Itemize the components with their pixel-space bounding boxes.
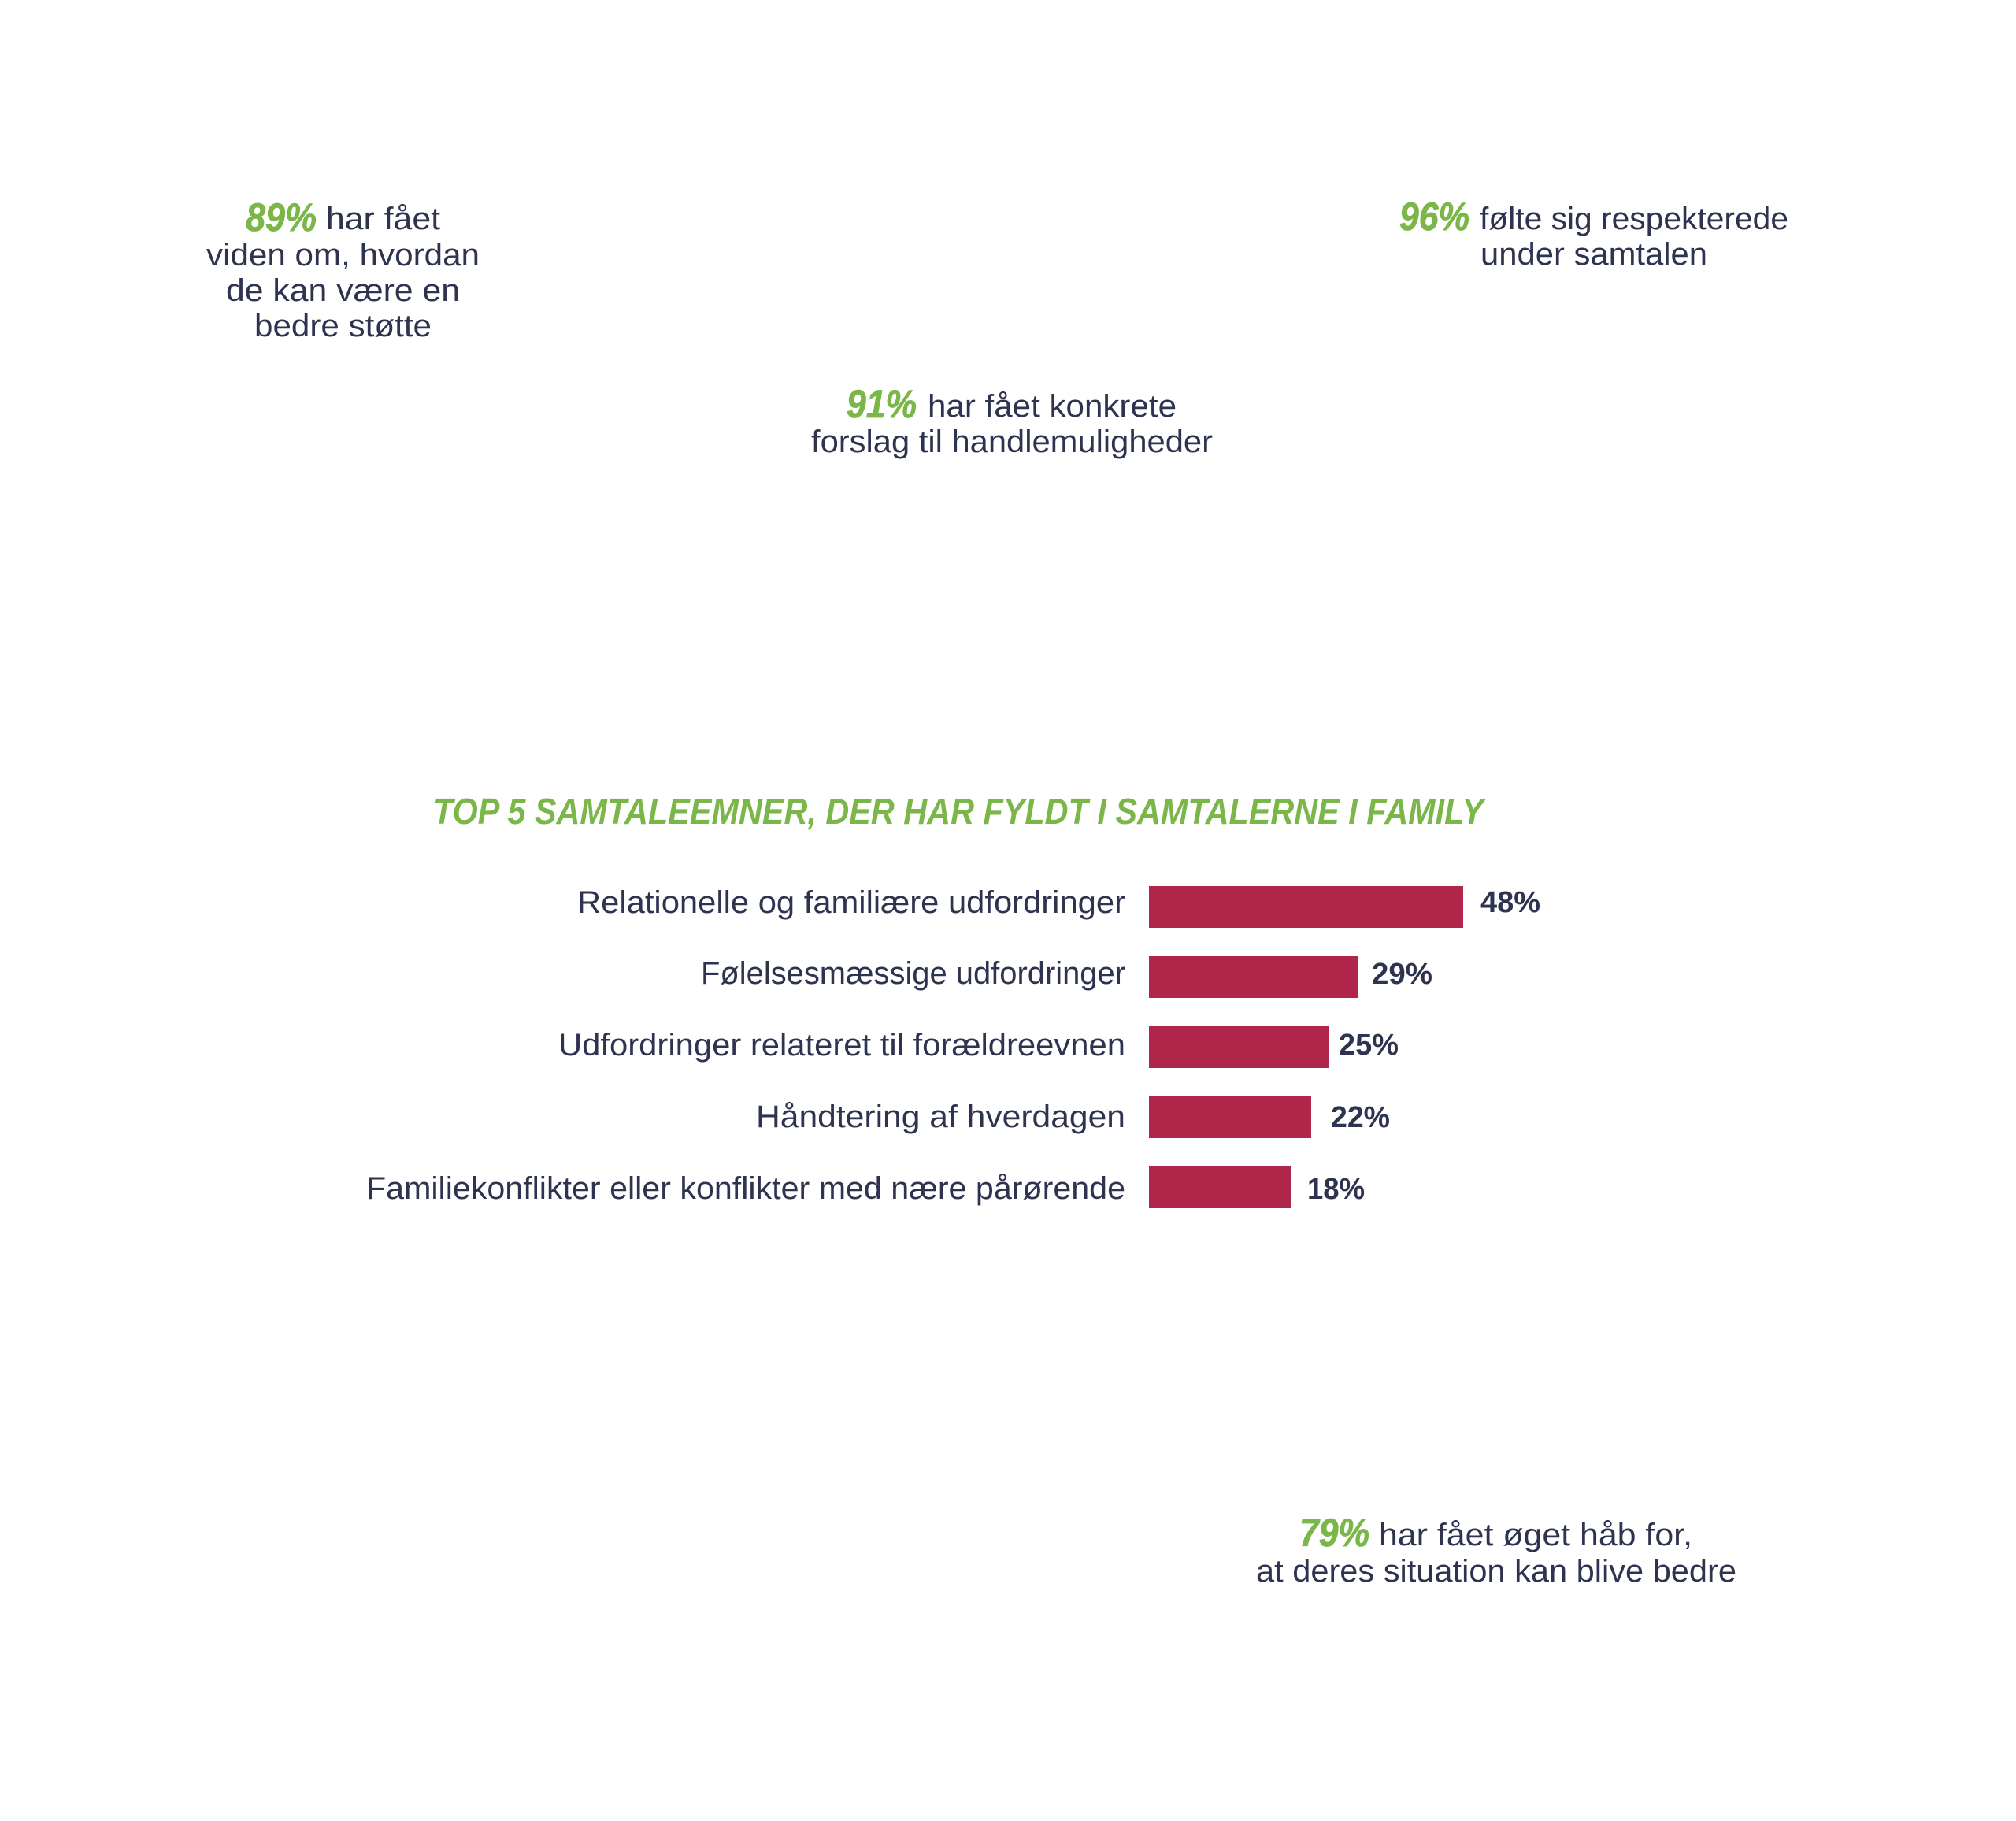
callout: 96% bbox=[1399, 195, 1788, 272]
callout text: respekterede: følte sig respekterede bbox=[1480, 202, 1788, 236]
row 4 bbox=[756, 1096, 1390, 1138]
bar chart bbox=[366, 885, 1540, 1208]
callout text: respekterede bbox=[1480, 202, 1788, 272]
callout text: øget håb bbox=[1256, 1518, 1736, 1589]
row 5: 18% bbox=[1307, 1173, 1365, 1206]
callout text: øget håb: har fået øget håb for, bbox=[1379, 1518, 1692, 1552]
row 5: Familiekonflikter eller konflikter med nære pårørende bbox=[366, 1171, 1125, 1206]
callout: 79% bbox=[1256, 1511, 1736, 1589]
callout text: viden om støtte: viden om, hvordan bbox=[206, 238, 480, 273]
callout text: viden om støtte bbox=[206, 202, 480, 343]
callout text: viden om støtte: har fået bbox=[326, 202, 440, 236]
statistic 96%: 96% bbox=[1399, 195, 1469, 239]
row 5 bbox=[366, 1166, 1365, 1208]
row 2: Følelsesmæssige udfordringer bbox=[701, 956, 1125, 991]
row 2: 29% bbox=[1372, 958, 1432, 991]
statistic 89%: 89% bbox=[246, 195, 317, 239]
chart title: TOP 5 SAMTALEEMNER, DER HAR FYLDT I SAMTALERNE I FAMILY bbox=[433, 791, 1487, 832]
row 3: Udfordringer relateret til forældreevnen bbox=[558, 1028, 1125, 1063]
callout: 91% bbox=[811, 382, 1213, 459]
callout text: handlemuligheder: forslag til handlemuligheder bbox=[811, 425, 1213, 459]
callout text: øget håb: at deres situation kan blive bedre bbox=[1256, 1554, 1736, 1589]
row 1 bbox=[577, 885, 1540, 928]
row 1: Relationelle og familiære udfordringer bbox=[577, 885, 1125, 920]
row 2 bbox=[701, 956, 1432, 998]
callout text: viden om støtte: bedre støtte bbox=[254, 309, 432, 343]
row 1: 48% bbox=[1480, 886, 1540, 919]
statistic 79%: 79% bbox=[1299, 1511, 1369, 1555]
callout text: viden om støtte: de kan være en bbox=[226, 273, 460, 308]
row 3: 25% bbox=[1339, 1029, 1399, 1062]
row 4: 22% bbox=[1331, 1101, 1390, 1134]
callout text: respekterede: under samtalen bbox=[1480, 237, 1707, 272]
callout: 89% bbox=[206, 195, 480, 343]
callout text: handlemuligheder: har fået konkrete bbox=[928, 389, 1177, 424]
row 3 bbox=[558, 1026, 1399, 1068]
callout text: handlemuligheder bbox=[811, 389, 1213, 459]
statistic 91%: 91% bbox=[847, 382, 917, 426]
row 4: Håndtering af hverdagen bbox=[756, 1100, 1125, 1134]
